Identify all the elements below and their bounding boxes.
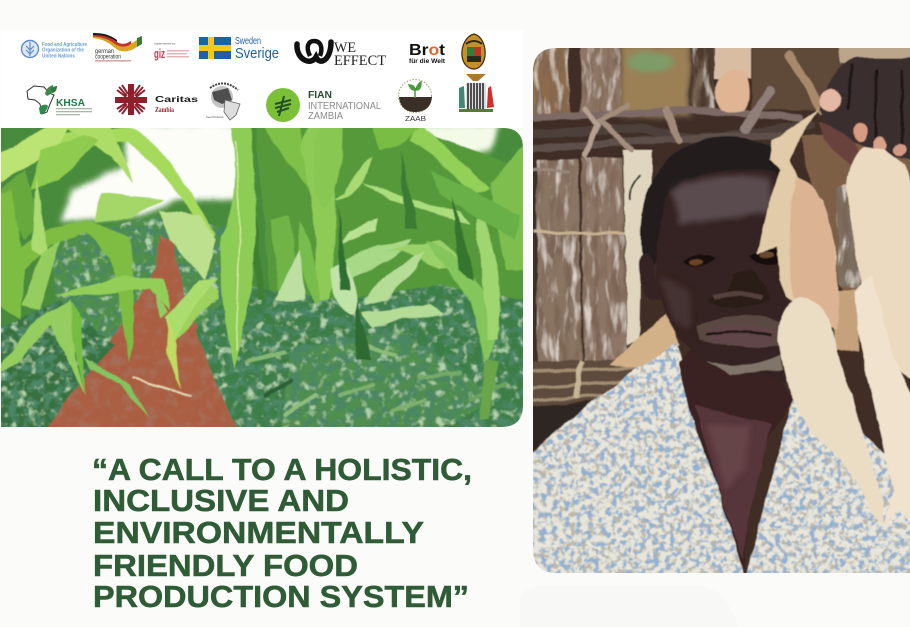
logo: KHSA: KHSA [56,97,85,109]
chilli leaves [250,345,505,415]
dried maize knob [714,70,750,113]
low shrubs left [0,300,115,432]
left arching maize leaves [60,128,216,237]
title: INCLUSIVE AND [93,484,349,518]
logo: FIAN International Zambia: ZAMBIA [308,111,343,122]
logo: FIAN International Zambia: INTERNATIONAL [308,101,381,112]
logo: ZAAB: ZAAB [405,114,426,123]
title [92,453,472,614]
logo: Sweden Sverige: Sweden [235,35,261,47]
right maize cob [847,147,910,380]
logo: We Effect [297,40,386,69]
logo: German Cooperation [93,33,142,62]
logo: Caritas Zambia: Zambia [155,105,174,114]
field background [1,128,523,328]
soil path [40,235,240,430]
logo: Zambia coat of arms [459,74,494,112]
white cloth [623,150,652,345]
photo: farmer holding dried maize [525,40,910,580]
logo: Brot fuer die Welt: Brot [409,42,446,59]
logo: Sweden Sverige [199,35,279,62]
bright sky behind the maize [60,124,240,222]
logo: GIZ: Implemented by [154,42,176,46]
lower lashed logs [533,359,634,406]
logo: FAO [22,40,87,60]
logo: German Cooperation: cooperation [95,54,121,60]
neck [678,340,793,572]
rock behind farmer [802,134,910,291]
logo: Sweden Sverige: Sverige [235,45,279,62]
face [656,169,792,385]
distant foliage [50,215,240,345]
logo strip [22,33,494,123]
logo: GIZ: giz [154,46,165,61]
title: ENVIRONMENTALLY [93,516,424,550]
right maize canopy [250,124,530,420]
hand holding maize [820,58,910,160]
distant maize [160,210,215,280]
logo: seed network: Seed Network [206,115,224,119]
lashed sticks [525,55,822,172]
logo: seed network [206,83,240,120]
photo background [525,40,910,580]
logo: Caritas Zambia [115,84,199,115]
photo: maize and vegetable field [0,124,530,432]
wooden posts [530,44,570,114]
logo: ZAAB [398,80,432,123]
logo: FAO: United Nations [42,54,75,60]
shirt [525,343,745,580]
ear [638,254,660,300]
left maize husk [757,108,838,330]
title: “A CALL TO A HOLISTIC, [92,453,472,487]
title: FRIENDLY FOOD [93,549,358,583]
logo: FAO: Food and Agriculture [42,42,87,48]
logo: university crest [462,34,485,69]
low chilli shrubs right [195,284,523,427]
logo: Brot fuer die Welt: für die Welt [409,58,446,65]
pale shape bottom [520,585,738,627]
left maize cob [778,297,884,527]
logo: KHSA [27,85,92,115]
logo: We Effect: EFFECT [334,53,386,69]
hair [641,137,790,265]
logo: FIAN International Zambia [266,88,381,122]
title: PRODUCTION SYSTEM” [93,580,469,614]
logo: FAO: Organization of the [42,48,84,54]
logo panel background [1,30,523,128]
logo: We Effect: WE [334,40,356,56]
centre maize leaf [220,124,255,368]
logo: German Cooperation: german [95,48,114,55]
logo: GIZ [154,42,189,61]
logo: FIAN International Zambia: FIAN [308,90,332,101]
logo: Caritas Zambia: Caritas [155,95,199,104]
